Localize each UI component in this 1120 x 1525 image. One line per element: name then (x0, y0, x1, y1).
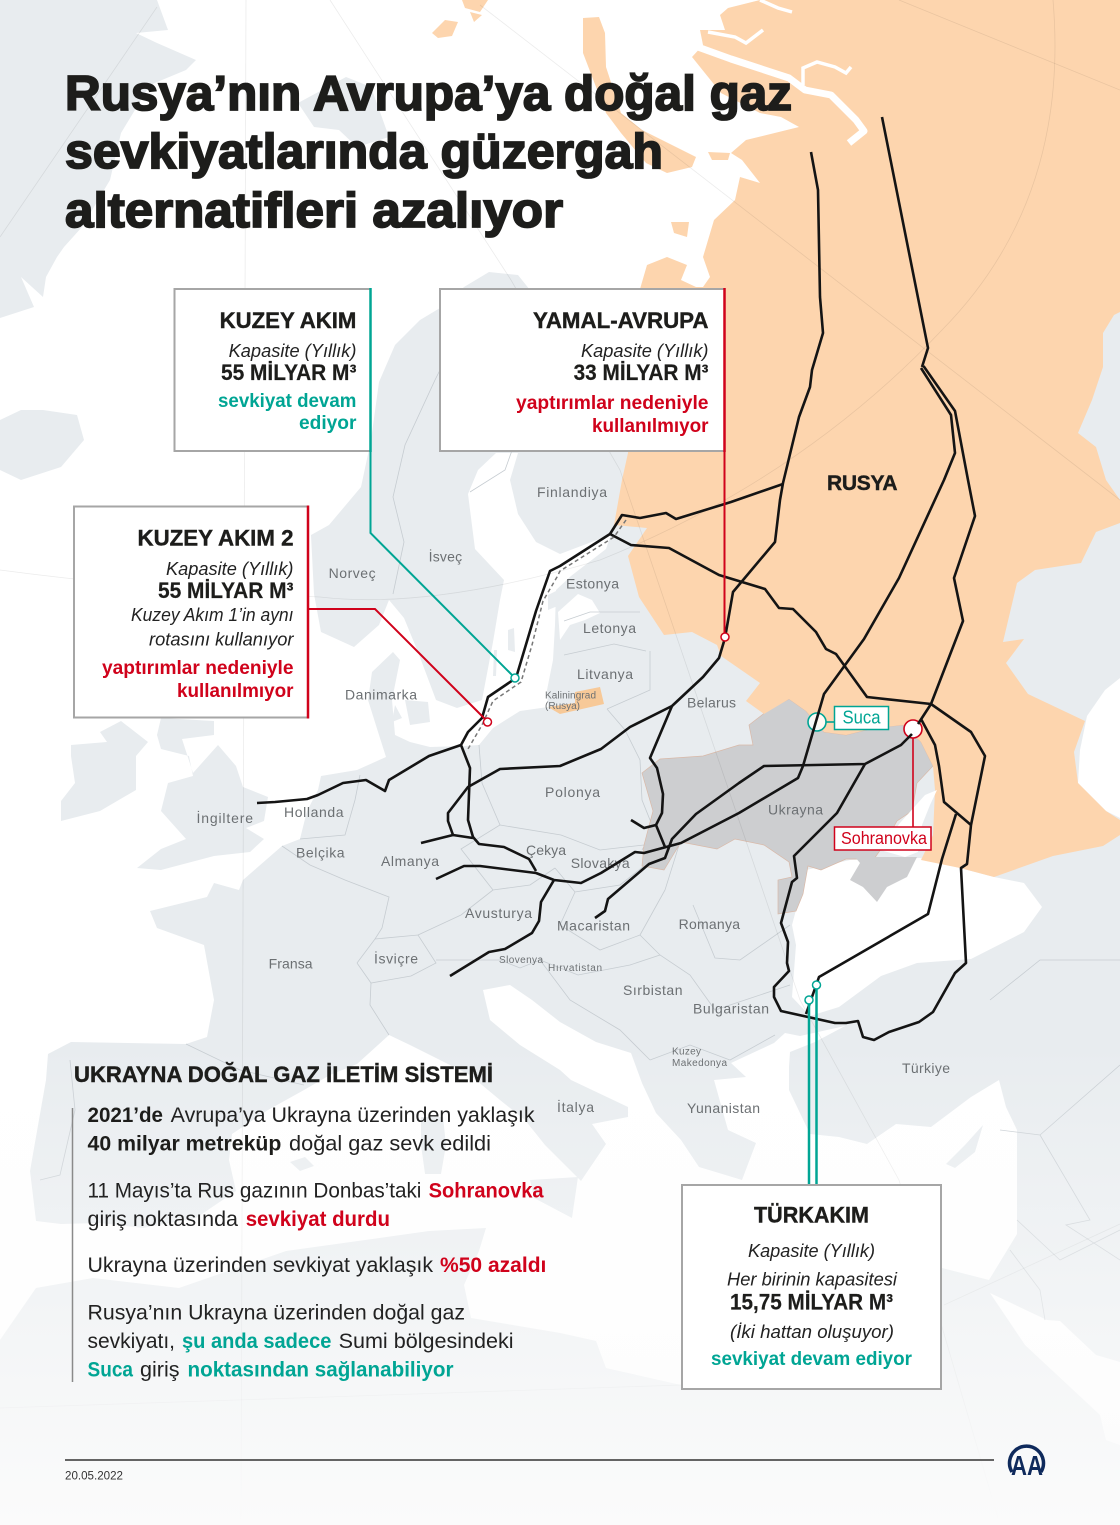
Russia: Franz Josef Land (432, 0, 488, 38)
panel: Kuzey Akim: 55 MİLYAR M³ (221, 360, 356, 385)
panel: Yamal-Avrupa: Kapasite (Yıllık) (581, 341, 708, 361)
pipeline: NEL west branch (436, 368, 955, 883)
panel: Kuzey Akim: ediyor (299, 413, 357, 434)
Sea of Azov (880, 790, 937, 857)
country labels: Slovenya (499, 955, 543, 966)
dots (484, 633, 820, 1004)
country labels: Estonya (566, 576, 619, 592)
country labels: Polonya (545, 784, 600, 800)
text block: Ukrayna summary: şu anda sadece (182, 1330, 331, 1353)
panel: Turkakim: (İki hattan oluşuyor) (730, 1322, 894, 1342)
panel: Kuzey Akim 2: Kuzey Akım 1’in aynı (131, 605, 294, 625)
text block: Ukrayna summary: sevkiyat durdu (246, 1208, 390, 1231)
panel: Kuzey Akim: sevkiyat devam (218, 391, 356, 412)
title: sevkiyatlarında güzergah (65, 125, 663, 179)
Russia: Taz inlet (803, 62, 851, 85)
panel: Turkakim: TÜRKAKIM (754, 1203, 869, 1228)
panel: Yamal-Avrupa: kullanılmıyor (592, 416, 709, 437)
callout leader: Sohranovka (912, 738, 914, 827)
date: 20.05.2022 (65, 1470, 123, 1482)
sea: Gulf of Riga (558, 594, 600, 640)
country labels: Kuzey (672, 1047, 701, 1058)
pipeline: second north line (918, 366, 975, 724)
panel: Turkakim: sevkiyat devam ediyor (711, 1349, 913, 1370)
text block: Ukrayna summary: giriş (140, 1359, 180, 1382)
pipeline: OPAL south (461, 745, 536, 871)
country labels: Sırbistan (623, 982, 682, 998)
logo: AA: AA (1011, 1450, 1043, 1481)
land: Greenland (0, 0, 196, 318)
land: Great Britain (137, 718, 268, 870)
panel: Turkakim: Her birinin kapasitesi (727, 1270, 898, 1290)
country labels: Kaliningrad (545, 690, 596, 702)
country labels: Hırvatistan (548, 963, 602, 974)
pipeline: Turkish Stream feed (921, 719, 971, 825)
panel: Turkakim: 15,75 MİLYAR M³ (730, 1290, 893, 1315)
text block: Ukrayna summary: Sumi bölgesindeki (339, 1330, 514, 1353)
pipeline: TransBalkan and Blue Stream loop (774, 704, 985, 1040)
label: Rusya: RUSYA (827, 472, 898, 495)
country labels: Çekya (526, 842, 566, 858)
country labels: Avusturya (465, 905, 532, 921)
Kaliningrad (548, 687, 604, 714)
panel: Kuzey Akim 2: yaptırımlar nedeniyle (102, 658, 294, 679)
text block: Ukrayna summary: noktasından sağlanabiliyor (188, 1359, 454, 1382)
country labels: Macaristan (557, 918, 630, 934)
Russia: Gulf of Ob and inlets (695, 46, 864, 143)
country borders (40, 290, 1120, 1320)
country labels: (Rusya) (545, 701, 580, 712)
bottom fade (0, 1040, 1120, 1525)
country labels: Yunanistan (687, 1100, 760, 1116)
country labels: İngiltere (196, 809, 253, 826)
text block: Ukrayna summary: 11 Mayıs’ta Rus gazının Donbas’taki (88, 1180, 421, 1202)
pipeline: Nord Stream (257, 484, 783, 803)
country labels: İsveç (429, 548, 462, 565)
country labels: Belarus (687, 695, 736, 711)
pipeline: Kuzey Akim 2 dashed (468, 520, 626, 749)
country labels: Norveç (329, 565, 376, 581)
country labels (196, 484, 950, 1116)
title (65, 67, 792, 238)
country labels: İsviçre (374, 949, 418, 966)
marker: Suca entry point (808, 713, 826, 731)
label: Sohranovka: Sohranovka (841, 828, 927, 848)
Russia: Kolguev and Vaygach (671, 152, 730, 237)
pipeline: Belarus branch (650, 706, 672, 847)
title: alternatifleri azalıyor (65, 184, 563, 238)
text block: Ukrayna summary: Avrupa’ya Ukrayna üzerinden yaklaşık (171, 1104, 535, 1127)
country labels: Makedonya (672, 1058, 727, 1069)
heading: Ukrayna system: UKRAYNA DOĞAL GAZ İLETİM SİSTEMİ (74, 1062, 493, 1087)
panel: Kuzey Akim: KUZEY AKIM (220, 308, 356, 333)
pipeline: north trunk (882, 117, 928, 367)
callout leader: Kuzey Akim 2 (308, 609, 487, 721)
country labels: Letonya (583, 620, 636, 636)
pipelines (257, 117, 985, 1040)
text block: Ukrayna summary: %50 azaldı (440, 1254, 546, 1277)
country labels: Ukrayna (768, 802, 823, 818)
callout leader: Yamal (724, 289, 726, 637)
country labels: Finlandiya (537, 484, 607, 500)
country labels: Romanya (679, 916, 740, 932)
country labels: Belçika (296, 845, 345, 861)
panel: Kuzey Akim (174, 288, 370, 452)
sea: Red Sea (990, 1293, 1120, 1445)
callout leader: Turkakim lines (809, 985, 816, 1184)
country labels: Bulgaristan (693, 1000, 769, 1016)
panel: Kuzey Akim 2: 55 MİLYAR M³ (158, 578, 294, 603)
panel: Turkakim (682, 1185, 941, 1389)
label: Suca (834, 706, 888, 730)
pipeline: Sohranovka line (595, 734, 912, 918)
land: Mediterranean islands (290, 1117, 983, 1218)
sea: Caspian (1078, 678, 1120, 818)
text block: Ukrayna summary: Ukrayna üzerinden sevkiyat yaklaşık (88, 1254, 434, 1277)
pipeline: Yamal-Europe (421, 152, 823, 843)
country labels: Türkiye (902, 1060, 950, 1076)
country labels: İtalya (557, 1098, 594, 1115)
land: Iceland (0, 410, 84, 480)
text block: Ukrayna summary: sevkiyatı, (88, 1330, 175, 1353)
marker: Sohranovka entry point (904, 720, 922, 738)
label: Suca: Suca (842, 708, 881, 728)
panel: Kuzey Akim: Kapasite (Yıllık) (229, 341, 356, 361)
callout leader: Kuzey Akim (370, 289, 515, 678)
pipeline: Turkish Stream branch (806, 814, 956, 1014)
text block: Ukrayna summary: Suca (88, 1359, 133, 1382)
text block: Ukrayna summary: Rusya’nın Ukrayna üzerinden doğal gaz (88, 1302, 465, 1325)
text block: Ukrayna summary: giriş noktasında (88, 1208, 238, 1231)
panel: Yamal-Avrupa: 33 MİLYAR M³ (574, 360, 708, 385)
text block: Ukrayna summary: 2021’de (88, 1104, 163, 1127)
sea: Black Sea (792, 858, 1042, 1016)
callout leader: Suca (826, 721, 834, 723)
panel: Kuzey Akim 2: Kapasite (Yıllık) (166, 559, 294, 579)
Crimea (850, 857, 917, 902)
panel: Kuzey Akim 2: KUZEY AKIM 2 (138, 526, 294, 550)
panel: Kuzey Akim 2: kullanılmıyor (177, 681, 294, 702)
Russia: Novaya Zemlya (583, 17, 696, 173)
pipeline: Russia west-east (610, 534, 931, 704)
land: Ireland (61, 721, 148, 821)
Russia (610, 0, 1120, 877)
panel: Kuzey Akim 2 (74, 506, 308, 718)
land: Baltic and Danish islands (392, 590, 560, 725)
text block: Ukrayna summary (72, 1104, 546, 1382)
country labels: Fransa (269, 956, 313, 972)
panel: Kuzey Akim 2: rotasını kullanıyor (149, 630, 295, 650)
country labels: Almanya (381, 853, 439, 869)
panel: Yamal-Avrupa: yaptırımlar nedeniyle (516, 393, 708, 414)
Russia: northern inlets (708, 0, 792, 43)
country labels: Hollanda (284, 804, 344, 820)
panel: Yamal-Avrupa (440, 288, 724, 452)
land: Svalbard (298, 77, 389, 147)
panel: Yamal-Avrupa: YAMAL-AVRUPA (533, 308, 709, 333)
text block: Ukrayna summary: 40 milyar metreküp (88, 1133, 281, 1156)
pipeline: small branch (631, 820, 656, 828)
text block: Ukrayna summary: Sohranovka (429, 1180, 544, 1202)
Ukraine (642, 699, 933, 914)
country labels: Litvanya (577, 666, 633, 682)
panel: Turkakim: Kapasite (Yıllık) (748, 1241, 875, 1261)
country labels: Slovakya (571, 855, 630, 871)
footer rule (65, 1459, 994, 1461)
text block: Ukrayna summary: doğal gaz sevk edildi (289, 1133, 491, 1156)
country labels: Danimarka (345, 687, 417, 703)
pipeline: Austria Italy (450, 880, 554, 976)
land: Scandinavia and Finland (311, 272, 647, 708)
pipeline: connector west (453, 835, 473, 838)
title: Rusya’nın Avrupa’ya doğal gaz (65, 67, 792, 121)
